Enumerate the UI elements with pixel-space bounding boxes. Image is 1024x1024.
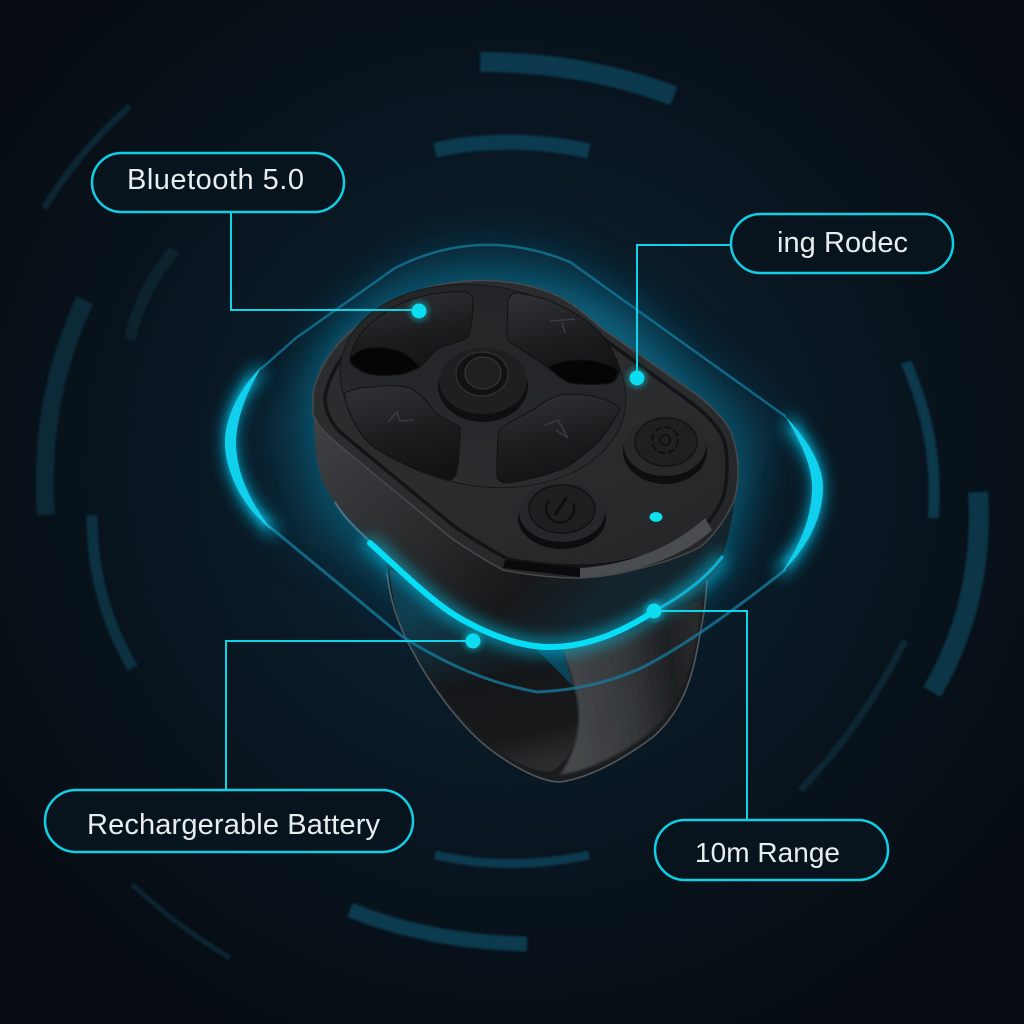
right crescent [782, 416, 823, 572]
bottom trim [503, 560, 580, 577]
decorative signal arcs [44, 62, 979, 958]
indicator LED [650, 512, 662, 522]
glass trim [335, 502, 400, 570]
power button [518, 482, 606, 549]
d-pad buttons [345, 292, 620, 483]
halo lines [262, 245, 785, 692]
callout: ing Rodec [626, 214, 953, 389]
callout: Bluetooth 5.0: Bluetooth 5.0 [127, 164, 304, 196]
device body [313, 263, 738, 646]
main bottom swoosh [370, 543, 653, 647]
left crescent [225, 366, 272, 530]
center button [438, 348, 528, 422]
callout: 10m Range [643, 600, 888, 880]
ring inner opening [390, 570, 580, 772]
callout: Rechargerable Battery [45, 630, 484, 852]
callout: 10m Range: 10m Range [695, 837, 840, 868]
ring band [387, 560, 707, 782]
callout: ing Rodec: ing Rodec [777, 227, 908, 259]
callout: Bluetooth 5.0 [92, 153, 430, 322]
ring grey band [560, 600, 702, 775]
d-pad recess [324, 263, 642, 509]
cyan glow swooshes [225, 366, 823, 647]
top face [313, 281, 738, 578]
d-pad arrow glyphs [388, 319, 575, 438]
device glow [262, 245, 782, 680]
callout: Rechargerable Battery: Rechargerable Battery [87, 809, 380, 841]
camera button [623, 416, 707, 484]
